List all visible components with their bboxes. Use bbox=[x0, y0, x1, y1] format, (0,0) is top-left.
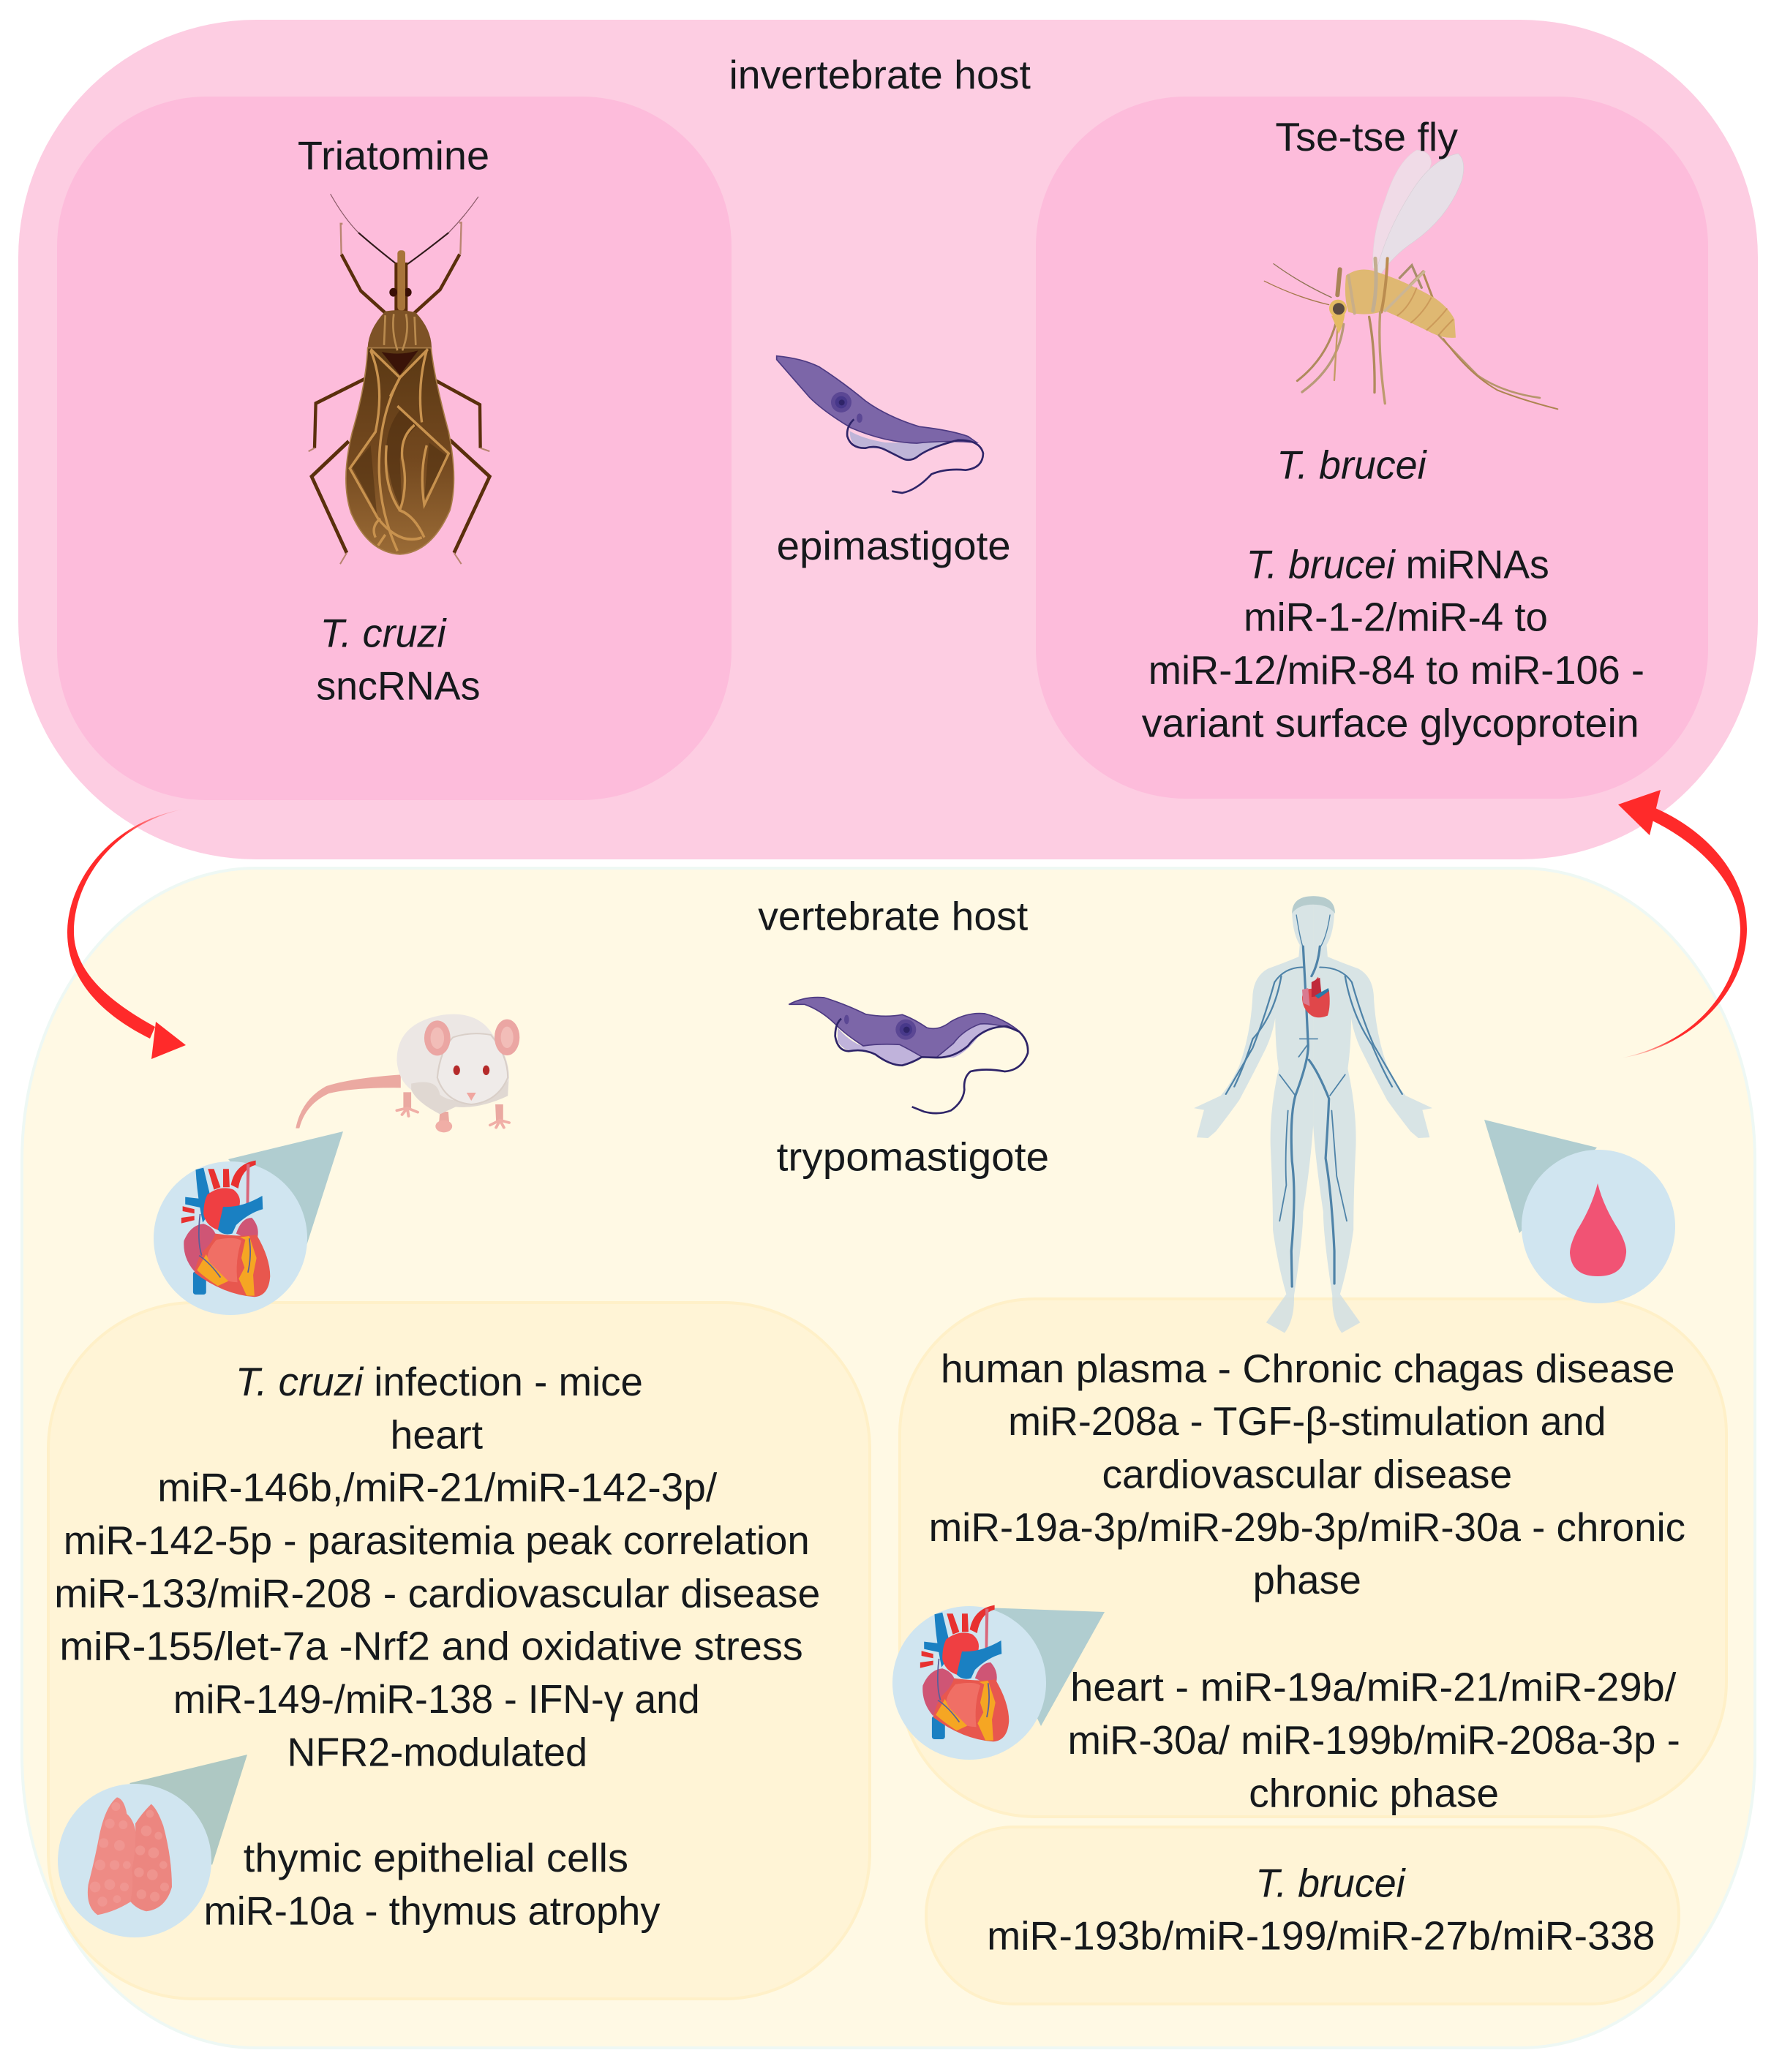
text: T. cruzi infection in mice heart: miR-149-/miR-138 - IFN-γ and bbox=[173, 1678, 700, 1722]
text: T. cruzi sncRNAs bbox=[316, 611, 480, 709]
text: human plasma miRNAs: miR-19a-3p/miR-29b-3p/miR-30a - chronic bbox=[929, 1506, 1685, 1550]
icon: human body with veins bbox=[1194, 896, 1432, 1333]
icon: epimastigote parasite bbox=[777, 356, 983, 493]
icon: thymus magnifier bbox=[58, 1755, 247, 1937]
text: T. cruzi infection in mice heart: T. cruzi infection - mice bbox=[236, 1360, 643, 1404]
text: T. brucei vertebrate miRNAs: T. brucei bbox=[1255, 1861, 1407, 1905]
text: T. brucei miRNAs bbox=[1142, 543, 1644, 745]
icon: blood drop bbox=[1570, 1183, 1626, 1276]
text: T. brucei miRNAs: miR-12/miR-84 to miR-106 - bbox=[1148, 649, 1644, 693]
icon: thymus bbox=[88, 1797, 172, 1915]
heading: vertebrate host: vertebrate host bbox=[758, 894, 1028, 938]
text: human heart miRNAs: chronic phase bbox=[1249, 1771, 1499, 1815]
text: human heart miRNAs: miR-30a/ miR-199b/miR-208a-3p - bbox=[1067, 1719, 1680, 1763]
icon: trypomastigote parasite bbox=[789, 998, 1028, 1113]
arrow: invertebrate to vertebrate host bbox=[67, 809, 186, 1059]
text: thymic epithelial cells bbox=[204, 1836, 661, 1933]
icon: heart magnifier (mouse) bbox=[154, 1131, 343, 1315]
text: T. cruzi infection in mice heart: heart bbox=[391, 1413, 483, 1457]
arrow: vertebrate to invertebrate host bbox=[1618, 790, 1747, 1058]
icon: heart bbox=[920, 1605, 1009, 1741]
text: T. cruzi infection in mice heart: miR-142-5p - parasitemia peak correlation bbox=[64, 1519, 810, 1563]
text: T. cruzi sncRNAs: sncRNAs bbox=[316, 665, 480, 709]
panel: triatomine inner box bbox=[57, 97, 732, 800]
text: thymic epithelial cells: thymic epithelial cells bbox=[244, 1836, 628, 1880]
icon: heart magnifier (human) bbox=[892, 1605, 1105, 1760]
text: thymic epithelial cells: miR-10a - thymus atrophy bbox=[204, 1889, 661, 1933]
label: epimastigote: epimastigote bbox=[777, 524, 1011, 568]
heading: Triatomine: Triatomine bbox=[298, 134, 489, 178]
text: T. cruzi infection in mice heart: miR-146b,/miR-21/miR-142-3p/ bbox=[157, 1466, 718, 1510]
icon: heart bbox=[181, 1161, 270, 1297]
label: trypomastigote: trypomastigote bbox=[777, 1136, 1049, 1180]
text: human plasma miRNAs bbox=[929, 1347, 1685, 1602]
text: T. brucei vertebrate miRNAs bbox=[987, 1861, 1655, 1959]
text: T. cruzi infection in mice heart: miR-155/let-7a -Nrf2 and oxidative stress bbox=[59, 1625, 803, 1669]
text: T. brucei miRNAs: T. brucei miRNAs bbox=[1247, 543, 1549, 587]
text: T. brucei miRNAs: variant surface glycoprotein bbox=[1142, 701, 1639, 745]
panel: tse-tse fly inner box bbox=[1036, 97, 1708, 799]
text: T. cruzi infection in mice heart: miR-133/miR-208 - cardiovascular disease bbox=[54, 1572, 820, 1616]
text: T. brucei miRNAs: miR-1-2/miR-4 to bbox=[1244, 596, 1548, 640]
text: human plasma miRNAs: miR-208a - TGF-β-stimulation and bbox=[1008, 1400, 1606, 1444]
text: human plasma miRNAs: human plasma - Chronic chagas disease bbox=[941, 1347, 1675, 1391]
panel: human plasma and heart results box bbox=[900, 1299, 1726, 1817]
text: T. brucei vertebrate miRNAs: miR-193b/miR-199/miR-27b/miR-338 bbox=[987, 1915, 1655, 1959]
icon: triatomine bug bbox=[309, 194, 489, 564]
text: human plasma miRNAs: cardiovascular disease bbox=[1102, 1453, 1512, 1497]
panel: T. brucei results box bbox=[926, 1827, 1679, 2004]
heading: Tse-tse fly: Tse-tse fly bbox=[1275, 116, 1459, 159]
text: human heart miRNAs: heart - miR-19a/miR-21/miR-29b/ bbox=[1070, 1666, 1677, 1710]
text: T. cruzi infection in mice heart bbox=[54, 1360, 820, 1774]
icon: tse-tse fly bbox=[1264, 150, 1557, 409]
heading: invertebrate host: invertebrate host bbox=[729, 53, 1031, 97]
panel: vertebrate host background bbox=[22, 868, 1755, 2048]
label: T. brucei: T. brucei bbox=[1277, 444, 1428, 488]
panel: T. cruzi mice results box bbox=[48, 1303, 870, 1999]
text: human plasma miRNAs: phase bbox=[1253, 1559, 1361, 1602]
icon: blood drop magnifier bbox=[1484, 1120, 1675, 1303]
panel: invertebrate host background bbox=[18, 20, 1758, 859]
icon: mouse bbox=[296, 1014, 519, 1132]
text: T. cruzi infection in mice heart: NFR2-modulated bbox=[287, 1730, 587, 1774]
text: human heart miRNAs bbox=[1067, 1666, 1680, 1815]
text: T. cruzi sncRNAs: T. cruzi bbox=[320, 611, 447, 655]
